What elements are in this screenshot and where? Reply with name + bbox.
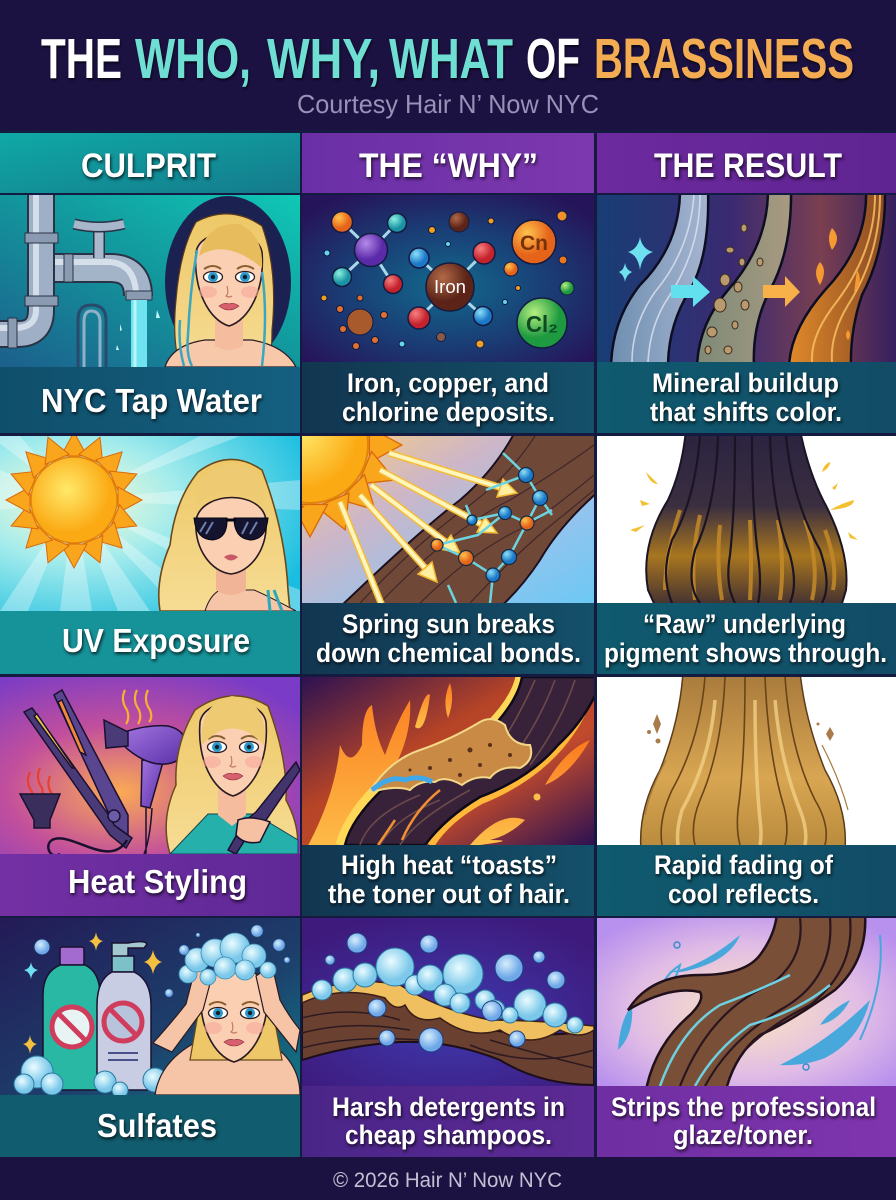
- foam: [312, 948, 583, 1033]
- caption: high heat: [302, 845, 594, 916]
- caption: strips glaze: Strips the professional: [611, 1092, 876, 1122]
- floating particles: [321, 211, 574, 350]
- caption: UV Exposure: UV Exposure: [62, 622, 250, 659]
- panel: rapid fading golden hair: [597, 672, 896, 850]
- iron molecule: Iron: [434, 277, 466, 297]
- foam at bottles: [14, 1056, 174, 1098]
- bubbles: [325, 933, 565, 1052]
- caption: harsh detergents: Harsh detergents in: [332, 1092, 565, 1122]
- iron molecule: [408, 242, 495, 329]
- caption: iron copper chlorine: chlorine deposits.: [342, 397, 555, 427]
- title: OF: [526, 27, 580, 91]
- title: WHAT: [389, 27, 513, 91]
- caption: harsh detergents: [302, 1086, 594, 1157]
- faint sparkles: [647, 714, 834, 744]
- toasted patch: [370, 719, 531, 792]
- woman with wet blonde hair: [165, 196, 296, 368]
- hair band: [342, 436, 594, 603]
- sun rays: [0, 436, 300, 620]
- caption: iron copper chlorine: [302, 362, 594, 433]
- yellow sparks: [630, 462, 858, 540]
- blue wisps: [618, 935, 870, 1065]
- subtitle: Courtesy Hair N’ Now NYC: [297, 89, 599, 119]
- stars: [23, 932, 162, 1054]
- woman with sunglasses: [159, 459, 296, 611]
- hair strand: [302, 991, 594, 1085]
- icon: heat waves: [28, 690, 151, 808]
- caption: raw pigment: “Raw” underlying: [643, 609, 846, 639]
- icon: water stream: [131, 300, 147, 367]
- sparkles and sparks: [619, 228, 860, 340]
- title: [41, 27, 854, 91]
- icon: flat iron: [24, 690, 132, 848]
- yellow hair edge: [340, 677, 520, 845]
- caption: iron copper chlorine: Iron, copper, and: [347, 368, 549, 398]
- hair back view: [646, 430, 847, 610]
- icon: sun: [6, 432, 142, 568]
- panel: heat styling illustration: [0, 677, 300, 855]
- brown hair: [628, 913, 865, 1090]
- panel: sulfates illustration: [0, 918, 300, 1098]
- caption: mineral buildup: [597, 362, 896, 433]
- icon: concentrator nozzle: [20, 794, 60, 828]
- strand: clean silver: [611, 190, 708, 367]
- panel: harsh detergents: [302, 918, 594, 1086]
- caption: rapid fading: Rapid fading of: [654, 850, 834, 880]
- copper sphere: [512, 220, 556, 264]
- light beams: [340, 453, 517, 608]
- column header: the result: [597, 133, 896, 193]
- caption: mineral buildup: Mineral buildup: [652, 368, 839, 398]
- molecular bonds: [437, 453, 552, 603]
- caption: high heat: High heat “toasts”: [341, 850, 557, 880]
- caption: raw pigment: [597, 603, 896, 674]
- sunglasses: [194, 518, 268, 540]
- panel: raw underlying pigment hair: [597, 430, 896, 610]
- caption: Sulfates: Sulfates: [97, 1107, 217, 1144]
- arrow: cyan: [671, 276, 710, 307]
- woman lathering hair: [153, 925, 300, 1095]
- icon: straightener in hand: [228, 762, 300, 854]
- caption: strips glaze: [597, 1086, 896, 1157]
- golden residue: [302, 982, 594, 1040]
- chlorine sphere: [517, 298, 567, 348]
- caption: NYC Tap Water: NYC Tap Water: [41, 382, 262, 419]
- caption: NYC Tap Water: [0, 367, 300, 433]
- caption: mineral buildup: that shifts color.: [650, 397, 842, 427]
- copper sphere: Cn: [520, 232, 548, 255]
- woman with wavy blonde hair: [166, 696, 300, 854]
- footer: [0, 1157, 896, 1200]
- panel: sun breaking bonds: [302, 436, 594, 603]
- purple molecule: [332, 212, 406, 294]
- panel: iron copper chlorine molecules: [302, 195, 594, 362]
- strand: mineral coated: [697, 190, 791, 367]
- title: WHY,: [267, 27, 380, 91]
- icon: white shampoo bottle: [97, 942, 151, 1090]
- foam on head: [179, 933, 276, 985]
- column header: the result: THE RESULT: [654, 147, 842, 185]
- caption: high heat: the toner out of hair.: [328, 879, 570, 909]
- icon: pipes and faucet: [0, 190, 138, 367]
- footer: © 2026 Hair N’ Now NYC: [333, 1169, 562, 1192]
- caption: Heat Styling: Heat Styling: [68, 863, 247, 900]
- caption: spring sun: down chemical bonds.: [316, 638, 581, 668]
- molecule bonds: [348, 228, 477, 311]
- hair back view: [641, 672, 845, 850]
- caption: UV Exposure: [0, 611, 300, 674]
- caption: Heat Styling: [0, 854, 300, 916]
- caption: harsh detergents: cheap shampoos.: [345, 1120, 552, 1150]
- molecule nodes: [431, 468, 548, 582]
- panel: strips glaze toner: [597, 913, 896, 1090]
- icon: teal shampoo bottle: [43, 947, 100, 1090]
- chlorine sphere: Cl₂: [526, 311, 558, 337]
- panel: NYC tap water illustration: [0, 190, 300, 368]
- column header: culprit: CULPRIT: [81, 147, 216, 185]
- caption: rapid fading: cool reflects.: [668, 879, 819, 909]
- column header: the why: THE “WHY”: [359, 147, 538, 185]
- caption: spring sun: Spring sun breaks: [342, 609, 555, 639]
- title: WHO,: [135, 27, 251, 91]
- title: THE: [41, 27, 122, 91]
- arms and hands: [153, 965, 212, 1052]
- sun: [302, 436, 403, 538]
- column header: culprit: [0, 133, 300, 193]
- column header: the why: [302, 133, 594, 193]
- caption: spring sun: [302, 603, 594, 674]
- caption: rapid fading: [597, 845, 896, 916]
- caption: Sulfates: [0, 1095, 300, 1157]
- panel: UV exposure illustration: [0, 432, 300, 620]
- arrow: orange: [763, 276, 800, 307]
- strand: brassy orange: [789, 190, 885, 367]
- icon: hair dryer: [104, 720, 186, 854]
- hair strand: [345, 677, 600, 845]
- flames: [300, 677, 590, 860]
- caption: strips glaze: glaze/toner.: [673, 1120, 813, 1150]
- panel: mineral buildup hair strands: [597, 190, 896, 367]
- panel: high heat toasting toner: [300, 677, 600, 860]
